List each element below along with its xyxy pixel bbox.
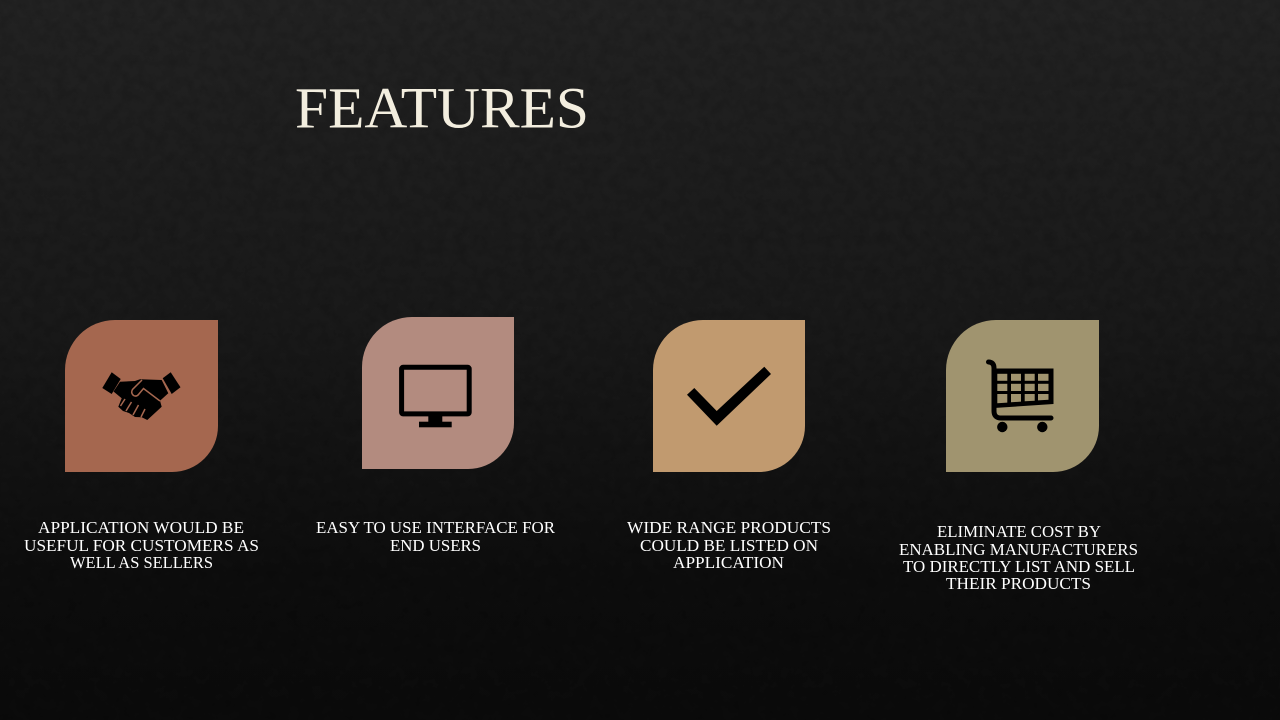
caption: APPLICATION	[673, 553, 784, 572]
caption	[899, 522, 1138, 593]
caption: END USERS	[390, 536, 481, 555]
panel: handshake feature	[24, 320, 259, 572]
caption: COULD BE LISTED ON	[640, 536, 818, 555]
panel: shopping cart feature	[899, 320, 1138, 593]
caption	[627, 518, 831, 572]
caption: APPLICATION WOULD BE	[38, 518, 244, 537]
caption: EASY TO USE INTERFACE FOR	[316, 518, 555, 537]
caption: WELL AS SELLERS	[70, 553, 213, 572]
icon: monitor	[402, 367, 469, 427]
caption: USEFUL FOR CUSTOMERS AS	[24, 536, 259, 555]
panel: checkmark feature	[627, 320, 831, 572]
caption: ELIMINATE COST BY	[937, 522, 1101, 541]
caption	[316, 518, 555, 555]
icon: shopping cart	[988, 362, 1054, 432]
icon: checkmark	[687, 367, 771, 426]
tile: terracotta	[65, 320, 218, 472]
icon: handshake	[102, 372, 180, 420]
tile: khaki	[946, 320, 1099, 472]
caption: TO DIRECTLY LIST AND SELL	[903, 557, 1135, 576]
tile: dusty rose	[362, 317, 514, 469]
caption: ENABLING MANUFACTURERS	[899, 540, 1138, 559]
caption: WIDE RANGE PRODUCTS	[627, 518, 831, 537]
title: FEATURES	[295, 76, 589, 140]
panel: monitor feature	[316, 317, 555, 555]
tile: tan	[653, 320, 805, 472]
caption	[24, 518, 259, 572]
caption: THEIR PRODUCTS	[946, 574, 1091, 593]
